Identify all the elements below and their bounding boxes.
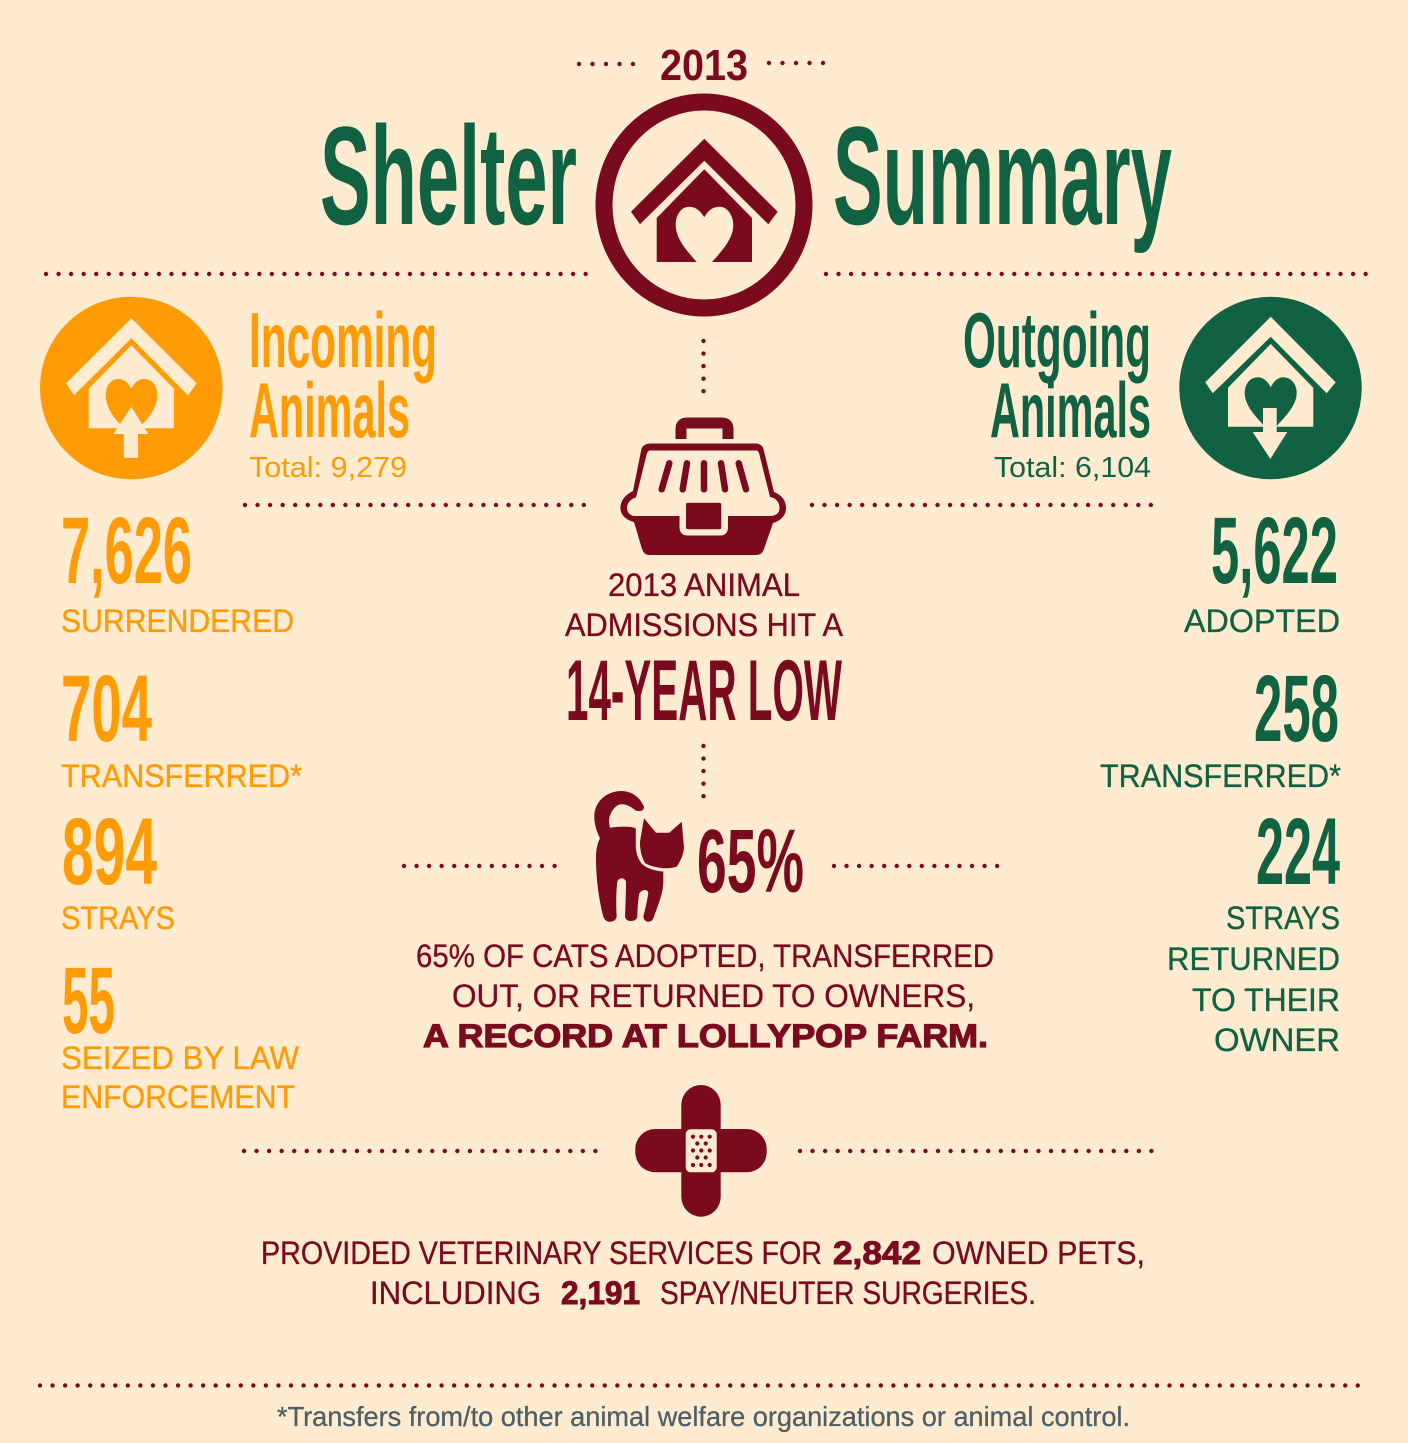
stat: adopted — [1184, 498, 1340, 639]
stat: strays — [61, 799, 175, 936]
text: veterinary services: PROVIDED VETERINARY SERVICES FOR — [261, 1235, 822, 1271]
icon: incoming house — [40, 297, 223, 479]
icon: cat — [594, 791, 684, 922]
title — [320, 97, 1172, 254]
stat: seized: 55 — [62, 948, 115, 1054]
stat: surrendered: 7,626 — [61, 498, 192, 604]
stat: strays returned: STRAYS — [1226, 900, 1340, 936]
panel: outgoing animals — [812, 296, 1362, 1058]
incoming total: Total: 9,279 — [249, 452, 407, 484]
text: admissions low: ADMISSIONS HIT A — [565, 607, 844, 643]
year heading: 2013 — [660, 41, 748, 90]
text: cat record: A RECORD AT LOLLYPOP FARM. — [423, 1018, 988, 1054]
icon: outgoing house — [1179, 297, 1362, 479]
text: cat record: 65% OF CATS ADOPTED, TRANSFERRED — [416, 938, 994, 974]
heading: incoming animals: Animals — [249, 366, 410, 454]
text: cat record: OUT, OR RETURNED TO OWNERS, — [452, 978, 975, 1014]
heading: outgoing animals: Outgoing — [963, 296, 1151, 384]
stat: adopted: ADOPTED — [1184, 603, 1340, 639]
stat: strays returned — [1167, 799, 1340, 1058]
text: admissions low: 2013 ANIMAL — [608, 567, 800, 603]
text: veterinary services: SPAY/NEUTER SURGERIES. — [660, 1275, 1036, 1311]
text: veterinary services: OWNED PETS, — [932, 1235, 1145, 1271]
text: veterinary services: 2,842 — [833, 1235, 921, 1271]
stat: seized: SEIZED BY LAW — [61, 1040, 300, 1076]
stat: strays returned: RETURNED — [1167, 941, 1340, 977]
stat: transferred out — [1100, 656, 1341, 794]
text: admissions low — [565, 567, 844, 739]
icon: pet carrier — [620, 423, 786, 555]
stat: transferred out: TRANSFERRED* — [1100, 758, 1341, 794]
stat: transferred in — [61, 656, 302, 794]
icon: house in ring — [604, 102, 804, 308]
title: Shelter — [320, 97, 577, 254]
heading: incoming animals — [249, 296, 437, 454]
heading: outgoing animals: Animals — [990, 366, 1151, 454]
text: veterinary services: INCLUDING — [370, 1275, 541, 1311]
text: 14-YEAR LOW — [566, 643, 842, 739]
stat: strays returned: TO THEIR — [1192, 982, 1340, 1018]
stat: strays returned: OWNER — [1214, 1022, 1340, 1058]
stat: surrendered: SURRENDERED — [61, 603, 294, 639]
stat: strays: 894 — [62, 799, 157, 905]
icon: bandage — [635, 1085, 767, 1217]
stat: transferred in: TRANSFERRED* — [61, 758, 302, 794]
stat: seized: ENFORCEMENT — [61, 1079, 295, 1115]
text: veterinary services — [261, 1235, 1145, 1311]
stat: strays: STRAYS — [61, 900, 175, 936]
stat: transferred in: 704 — [61, 656, 152, 762]
heading: incoming animals: Incoming — [249, 296, 437, 384]
text: cat record — [416, 938, 994, 1054]
stat: transferred out: 258 — [1254, 656, 1339, 762]
footnote: *Transfers from/to other animal welfare organizations or animal control. — [277, 1401, 1130, 1432]
text: veterinary services: 2,191 — [561, 1275, 640, 1311]
stat: seized — [61, 948, 300, 1115]
outgoing total: Total: 6,104 — [994, 452, 1151, 484]
panel: incoming animals — [40, 296, 586, 1115]
stat: 65 percent: 65% — [697, 812, 804, 912]
heading: outgoing animals — [963, 296, 1151, 454]
